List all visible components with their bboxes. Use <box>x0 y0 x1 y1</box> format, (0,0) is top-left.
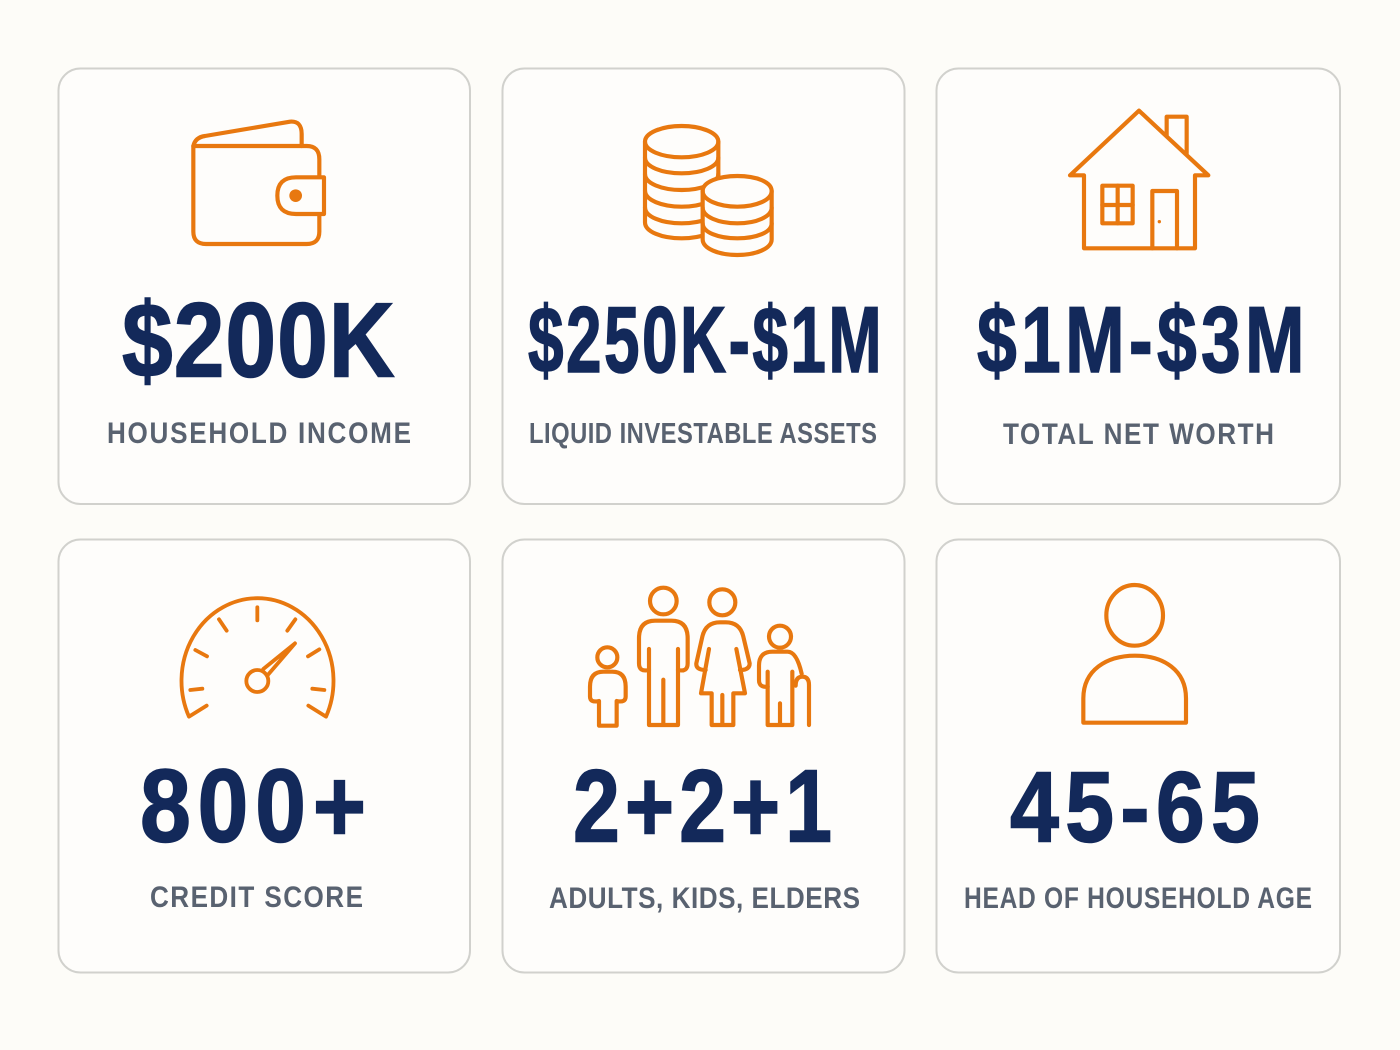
label: credit score: CREDIT SCORE <box>150 880 363 913</box>
panel: total net worth <box>936 68 1340 504</box>
label: liquid investable assets: LIQUID INVESTABLE ASSETS <box>529 417 877 450</box>
panel: household income <box>58 68 470 504</box>
icon: family <box>590 588 809 726</box>
icon: coin stacks <box>645 126 772 255</box>
value: 2+2+1: 2+2+1 <box>573 749 832 863</box>
value: $1M-$3M: $1M-$3M <box>977 286 1305 392</box>
panel: liquid investable assets <box>502 68 904 504</box>
icon: gauge <box>181 598 333 717</box>
child <box>590 647 626 726</box>
value: 800+: 800+ <box>140 747 366 864</box>
value: $250K-$1M: $250K-$1M <box>528 288 882 393</box>
label: adults, kids, elders: ADULTS, KIDS, ELDERS <box>549 881 860 914</box>
label: household income: HOUSEHOLD INCOME <box>107 416 411 449</box>
panel: credit score <box>58 540 470 972</box>
panel: head of household age <box>936 540 1340 972</box>
value: $200K: $200K <box>122 281 395 399</box>
elder <box>759 626 809 725</box>
panel: adults, kids, elders <box>502 540 904 972</box>
icon: person <box>1083 585 1186 723</box>
icon: wallet <box>193 122 324 244</box>
icon: house <box>1070 111 1208 248</box>
father <box>639 588 688 725</box>
label: total net worth: TOTAL NET WORTH <box>1003 417 1274 450</box>
label: head of household age: HEAD OF HOUSEHOLD AGE <box>964 881 1312 915</box>
value: 45-65: 45-65 <box>1010 751 1260 863</box>
mother <box>696 589 750 725</box>
